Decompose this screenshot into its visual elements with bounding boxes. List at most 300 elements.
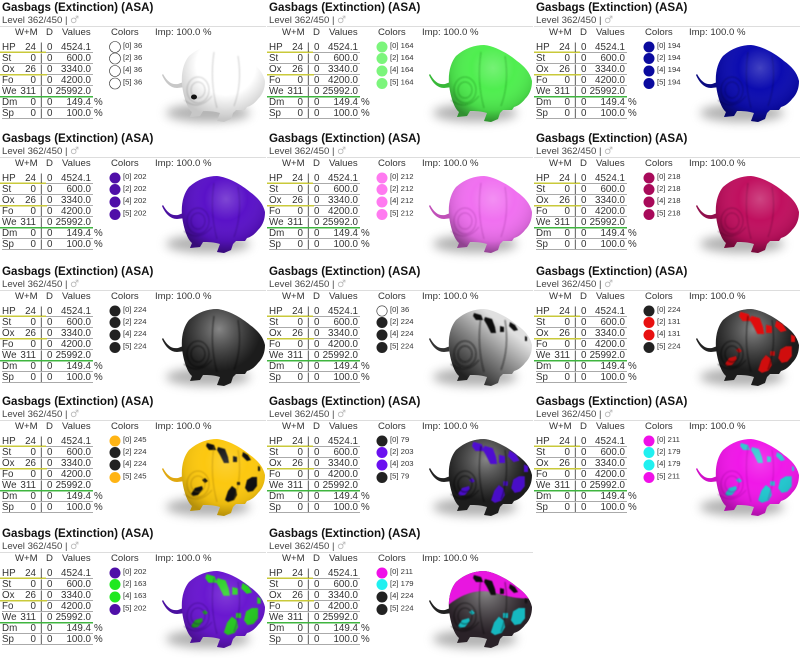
colour swatches: [0] 224 <box>123 305 147 314</box>
stats table: 25992.0 <box>323 350 359 361</box>
stats table: 0 <box>47 623 53 634</box>
stats table: 0 <box>31 97 37 108</box>
stats table <box>0 421 212 513</box>
stats table: 0 <box>581 64 587 75</box>
colour swatches: [2] 194 <box>657 53 681 62</box>
stats table: Fo <box>269 339 281 350</box>
stats table: Sp <box>2 372 15 383</box>
colour swatches: [5] 224 <box>390 342 414 350</box>
stats table: 0 <box>581 306 587 317</box>
title: Gasbags (Extinction) (ASA) <box>536 265 688 278</box>
stats table: 25992.0 <box>323 86 359 97</box>
stats table: 24 <box>559 173 571 184</box>
colour swatches: [0] 211 <box>657 435 680 444</box>
stats table: 4200.0 <box>595 206 626 217</box>
stats table: 0 <box>298 634 304 645</box>
stats table: 26 <box>559 328 571 339</box>
stats table: | <box>40 579 43 590</box>
stats table: 100.0 <box>333 239 359 250</box>
stats table: | <box>574 206 577 217</box>
stats table: 0 <box>47 372 53 383</box>
stats table: Values <box>329 553 358 564</box>
stats table: 4200.0 <box>595 469 626 480</box>
stats table: We <box>2 86 17 97</box>
stats table: Sp <box>269 372 282 383</box>
stats table: 0 <box>47 217 53 228</box>
stats table: % <box>361 623 370 634</box>
stats table: % <box>94 634 103 645</box>
colour swatches: [5] 202 <box>123 604 147 612</box>
stats table: 3340.0 <box>61 328 92 339</box>
stats table: | <box>307 447 310 458</box>
panel: dark with purple patches <box>267 395 533 516</box>
level: Level 362/450 | ♂ <box>536 279 613 290</box>
colour swatches: [4] 194 <box>657 65 681 74</box>
stats table: W+M <box>282 291 305 302</box>
stats table: 100.0 <box>333 502 359 513</box>
colour swatches: [4] 179 <box>657 459 681 468</box>
stats table: | <box>307 372 310 383</box>
colour swatches <box>376 41 414 89</box>
stats table: Sp <box>2 634 15 645</box>
stats table: 3340.0 <box>328 590 359 601</box>
stats table: 0 <box>581 184 587 195</box>
stats table: 600.0 <box>600 53 626 64</box>
stats table <box>267 158 479 250</box>
stats table: | <box>574 502 577 513</box>
stats table: 0 <box>581 436 587 447</box>
stats table: 0 <box>298 75 304 86</box>
stats table: Sp <box>536 239 549 250</box>
stats table: We <box>269 612 284 623</box>
stats table: 0 <box>314 173 320 184</box>
stats table: 24 <box>25 42 37 53</box>
stats table: Values <box>596 27 625 38</box>
stats table: 0 <box>581 86 587 97</box>
stats table: Colors <box>111 421 139 432</box>
title: Gasbags (Extinction) (ASA) <box>2 527 154 540</box>
stats table: Imp: 100.0 % <box>155 27 212 38</box>
stats table: 0 <box>565 317 571 328</box>
stats table: 0 <box>31 228 37 239</box>
colour swatches: [2] 36 <box>123 53 142 62</box>
creature <box>696 309 799 386</box>
stats table: Ox <box>536 195 549 206</box>
stats table: % <box>628 372 637 383</box>
stats table: 0 <box>565 239 571 250</box>
stats table: HP <box>269 436 283 447</box>
colour swatches <box>110 435 147 483</box>
stats table: 4524.1 <box>328 568 358 579</box>
stats table: 0 <box>47 53 53 64</box>
stats table: Colors <box>111 27 139 38</box>
colour swatches: [0] 79 <box>390 435 409 444</box>
stats table: | <box>574 195 577 206</box>
stats table: 0 <box>314 75 320 86</box>
stats table: 0 <box>314 447 320 458</box>
stats table: % <box>361 502 370 513</box>
stats table: | <box>574 306 577 317</box>
stats table <box>0 553 212 645</box>
stats table: 0 <box>314 436 320 447</box>
stats table: 100.0 <box>600 502 626 513</box>
stats table: 0 <box>314 53 320 64</box>
stats table: We <box>269 480 284 491</box>
stats table: 0 <box>31 339 37 350</box>
stats table: 0 <box>581 372 587 383</box>
creature <box>162 439 265 516</box>
stats table: We <box>2 217 17 228</box>
stats table: 600.0 <box>66 579 92 590</box>
stats table: | <box>40 173 43 184</box>
stats table: Ox <box>2 458 15 469</box>
stats table: W+M <box>282 158 305 169</box>
stats table: 149.4 <box>600 491 626 502</box>
stats table: Ox <box>536 64 549 75</box>
colour swatches: [0] 211 <box>390 567 413 576</box>
stats table: Colors <box>111 158 139 169</box>
stats table: | <box>307 634 310 645</box>
level: Level 362/450 | ♂ <box>536 409 613 420</box>
stats table: 0 <box>565 184 571 195</box>
colour swatches: [2] 218 <box>657 184 681 193</box>
title: Gasbags (Extinction) (ASA) <box>536 1 688 14</box>
stats table: St <box>2 317 12 328</box>
stats table: 100.0 <box>66 239 92 250</box>
creature <box>162 309 265 386</box>
stats table: % <box>94 361 103 372</box>
stats table: D <box>46 158 53 169</box>
panel: magenta, cyan and black <box>267 527 537 648</box>
colour swatches: [0] 36 <box>123 41 142 50</box>
stats table: W+M <box>549 158 572 169</box>
stats table: 0 <box>314 361 320 372</box>
stats table: % <box>628 108 637 119</box>
stats table: Dm <box>2 228 17 239</box>
stats table: | <box>307 469 310 480</box>
stats table: 0 <box>581 239 587 250</box>
stats table: 0 <box>47 590 53 601</box>
stats table: 26 <box>559 195 571 206</box>
stats table: 0 <box>298 97 304 108</box>
stats table: | <box>307 86 310 97</box>
stats table: | <box>307 97 310 108</box>
stats table: | <box>574 361 577 372</box>
level: Level 362/450 | ♂ <box>536 146 613 157</box>
stats table: % <box>94 491 103 502</box>
stats table: D <box>313 291 320 302</box>
stats table: HP <box>2 42 16 53</box>
stats table: Values <box>596 421 625 432</box>
stats table: 0 <box>298 469 304 480</box>
stats table: 26 <box>292 64 304 75</box>
colour swatches: [0] 36 <box>390 305 409 314</box>
stats table: 0 <box>47 86 53 97</box>
stats table: 0 <box>31 623 37 634</box>
panel: purple 202 <box>0 132 266 253</box>
stats table: Ox <box>269 590 282 601</box>
creature <box>429 309 532 386</box>
colour swatches: [4] 164 <box>390 65 414 74</box>
stats table: Dm <box>2 97 17 108</box>
stats table: Fo <box>269 601 281 612</box>
stats table: % <box>628 491 637 502</box>
stats table: 0 <box>298 184 304 195</box>
stats table: | <box>574 480 577 491</box>
panel: green 164 <box>267 1 533 122</box>
stats table: 0 <box>47 480 53 491</box>
stats table: 0 <box>581 206 587 217</box>
stats table: 0 <box>314 339 320 350</box>
level: Level 362/450 | ♂ <box>2 15 79 26</box>
stats table: 0 <box>314 350 320 361</box>
stats table: 100.0 <box>333 108 359 119</box>
stats table: Ox <box>2 328 15 339</box>
stats table: W+M <box>15 27 38 38</box>
stats table: We <box>2 480 17 491</box>
stats table: | <box>40 590 43 601</box>
stats table: 0 <box>31 239 37 250</box>
stats table: 600.0 <box>66 184 92 195</box>
stats table: We <box>536 350 551 361</box>
colour swatches: [2] 224 <box>390 317 414 326</box>
stats table: We <box>536 86 551 97</box>
colour swatches <box>376 172 414 220</box>
stats table <box>267 27 479 119</box>
stats table: | <box>574 217 577 228</box>
stats table <box>534 158 746 250</box>
stats table: Sp <box>2 502 15 513</box>
creature <box>162 45 265 122</box>
stats table: HP <box>2 306 16 317</box>
stats table: 25992.0 <box>590 480 626 491</box>
stats table: 4200.0 <box>61 469 92 480</box>
stats table: 311 <box>554 350 570 361</box>
stats table: 0 <box>298 206 304 217</box>
colour swatches: [5] 211 <box>657 472 680 480</box>
stats table: D <box>580 158 587 169</box>
stats table: 0 <box>47 339 53 350</box>
stats table: 25992.0 <box>590 350 626 361</box>
colour swatches: [4] 224 <box>390 329 414 338</box>
stats table: 0 <box>581 42 587 53</box>
stats table: 600.0 <box>600 447 626 458</box>
stats table: 0 <box>581 339 587 350</box>
stats table: 4200.0 <box>328 469 359 480</box>
stats table: 600.0 <box>66 447 92 458</box>
stats table: | <box>574 64 577 75</box>
stats table: | <box>307 623 310 634</box>
stats table: 0 <box>314 317 320 328</box>
stats table: 4200.0 <box>61 206 92 217</box>
colour swatches: [2] 179 <box>657 447 681 456</box>
stats table: 3340.0 <box>61 590 92 601</box>
stats table: Colors <box>378 291 406 302</box>
stats table: | <box>40 372 43 383</box>
stats table: | <box>40 206 43 217</box>
stats table: 0 <box>581 328 587 339</box>
colour swatches <box>110 172 147 220</box>
colour swatches: [5] 212 <box>390 208 414 218</box>
stats table: | <box>40 480 43 491</box>
stats table: 0 <box>31 579 37 590</box>
colour swatches: [0] 202 <box>123 567 147 576</box>
stats table: | <box>307 42 310 53</box>
stats table: | <box>574 447 577 458</box>
stats table: | <box>40 239 43 250</box>
stats table: | <box>574 97 577 108</box>
stats table: | <box>574 350 577 361</box>
stats table: 0 <box>314 239 320 250</box>
stats table: | <box>40 75 43 86</box>
stats table: | <box>40 447 43 458</box>
stats table: 0 <box>581 97 587 108</box>
stats table: 0 <box>47 317 53 328</box>
stats table: 600.0 <box>600 184 626 195</box>
stats table: | <box>574 317 577 328</box>
title: Gasbags (Extinction) (ASA) <box>269 527 421 540</box>
stats table: 0 <box>565 491 571 502</box>
stats table: 0 <box>565 108 571 119</box>
stats table: HP <box>2 173 16 184</box>
stats table: 0 <box>298 228 304 239</box>
stats table: 26 <box>292 458 304 469</box>
stats table: | <box>307 436 310 447</box>
stats table: 3340.0 <box>61 195 92 206</box>
stats table: 0 <box>565 372 571 383</box>
stats table: 4524.1 <box>328 306 358 317</box>
stats table: Dm <box>536 228 551 239</box>
stats table: 4524.1 <box>61 42 91 53</box>
stats table: Imp: 100.0 % <box>155 291 212 302</box>
stats table: W+M <box>549 27 572 38</box>
stats table: | <box>307 306 310 317</box>
panel: silver with black patches <box>267 265 533 386</box>
stats table: Dm <box>536 361 551 372</box>
stats table: 24 <box>559 436 571 447</box>
stats table: HP <box>536 173 550 184</box>
stats table: 0 <box>565 97 571 108</box>
stats table: | <box>574 228 577 239</box>
stats table: 3340.0 <box>61 458 92 469</box>
stats table: 0 <box>565 228 571 239</box>
stats table: W+M <box>15 291 38 302</box>
stats table: Ox <box>269 328 282 339</box>
stats table: 3340.0 <box>328 195 359 206</box>
panel: black 224 <box>0 265 266 386</box>
stats table: Fo <box>269 75 281 86</box>
stats table: % <box>628 502 637 513</box>
stats table: 0 <box>47 502 53 513</box>
stats table: 311 <box>20 217 36 228</box>
stats table: 4524.1 <box>595 306 625 317</box>
stats table: 0 <box>47 228 53 239</box>
stats table: 0 <box>31 317 37 328</box>
stats table: | <box>307 568 310 579</box>
panel: blue 194 <box>534 1 800 122</box>
stats table: 0 <box>565 361 571 372</box>
stats table: 26 <box>25 590 37 601</box>
colour swatches: [2] 202 <box>123 184 147 193</box>
stats table: HP <box>269 173 283 184</box>
stats table: 25992.0 <box>56 217 92 228</box>
stats table <box>534 291 746 383</box>
stats table: | <box>574 42 577 53</box>
stats table: | <box>40 328 43 339</box>
stats table: Sp <box>536 372 549 383</box>
colour swatches: [2] 163 <box>123 579 147 588</box>
stats table: 0 <box>31 447 37 458</box>
stats table: 24 <box>25 173 37 184</box>
stats table: 0 <box>314 502 320 513</box>
stats table: D <box>46 553 53 564</box>
stats table: Imp: 100.0 % <box>155 553 212 564</box>
stats table: | <box>574 458 577 469</box>
level: Level 362/450 | ♂ <box>2 541 79 552</box>
colour swatches: [2] 224 <box>123 447 147 456</box>
stats table: 311 <box>20 612 36 623</box>
stats table: 0 <box>298 601 304 612</box>
stats table: 0 <box>314 634 320 645</box>
stats table: 149.4 <box>66 491 92 502</box>
colour swatches: [2] 224 <box>123 317 147 326</box>
panel: dark with red patches <box>534 265 800 386</box>
stats table: 26 <box>292 590 304 601</box>
stats table: % <box>94 372 103 383</box>
stats table: % <box>628 228 637 239</box>
stats table: 0 <box>298 361 304 372</box>
stats table: 24 <box>559 306 571 317</box>
stats table: 25992.0 <box>56 86 92 97</box>
colour swatches: [4] 36 <box>123 65 142 74</box>
stats table: 0 <box>314 195 320 206</box>
stats table: Sp <box>269 634 282 645</box>
stats table: 0 <box>581 447 587 458</box>
stats table: HP <box>269 42 283 53</box>
colour swatches: [2] 179 <box>390 579 414 588</box>
stats table: | <box>307 53 310 64</box>
stats table: Dm <box>269 491 284 502</box>
stats table: 0 <box>47 64 53 75</box>
title: Gasbags (Extinction) (ASA) <box>2 132 154 145</box>
stats table: 4200.0 <box>61 339 92 350</box>
stats table: 0 <box>565 53 571 64</box>
stats table: % <box>628 361 637 372</box>
stats table: 0 <box>298 579 304 590</box>
creature <box>429 176 532 253</box>
stats table: W+M <box>15 158 38 169</box>
stats table: Values <box>329 158 358 169</box>
stats table: W+M <box>282 421 305 432</box>
stats table: 0 <box>314 469 320 480</box>
stats table: | <box>574 491 577 502</box>
stats table: | <box>574 108 577 119</box>
stats table: % <box>94 97 103 108</box>
stats table: | <box>307 339 310 350</box>
stats table: 0 <box>31 601 37 612</box>
stats table: Values <box>329 421 358 432</box>
stats table: 0 <box>581 317 587 328</box>
stats table: | <box>40 502 43 513</box>
stats table: 0 <box>314 579 320 590</box>
stats table: 4524.1 <box>595 42 625 53</box>
stats table: 100.0 <box>600 372 626 383</box>
stats table: HP <box>536 436 550 447</box>
colour swatches: [0] 212 <box>390 172 414 181</box>
colour swatches: [5] 202 <box>123 208 147 218</box>
stats table: 0 <box>47 601 53 612</box>
stats table: 26 <box>292 195 304 206</box>
